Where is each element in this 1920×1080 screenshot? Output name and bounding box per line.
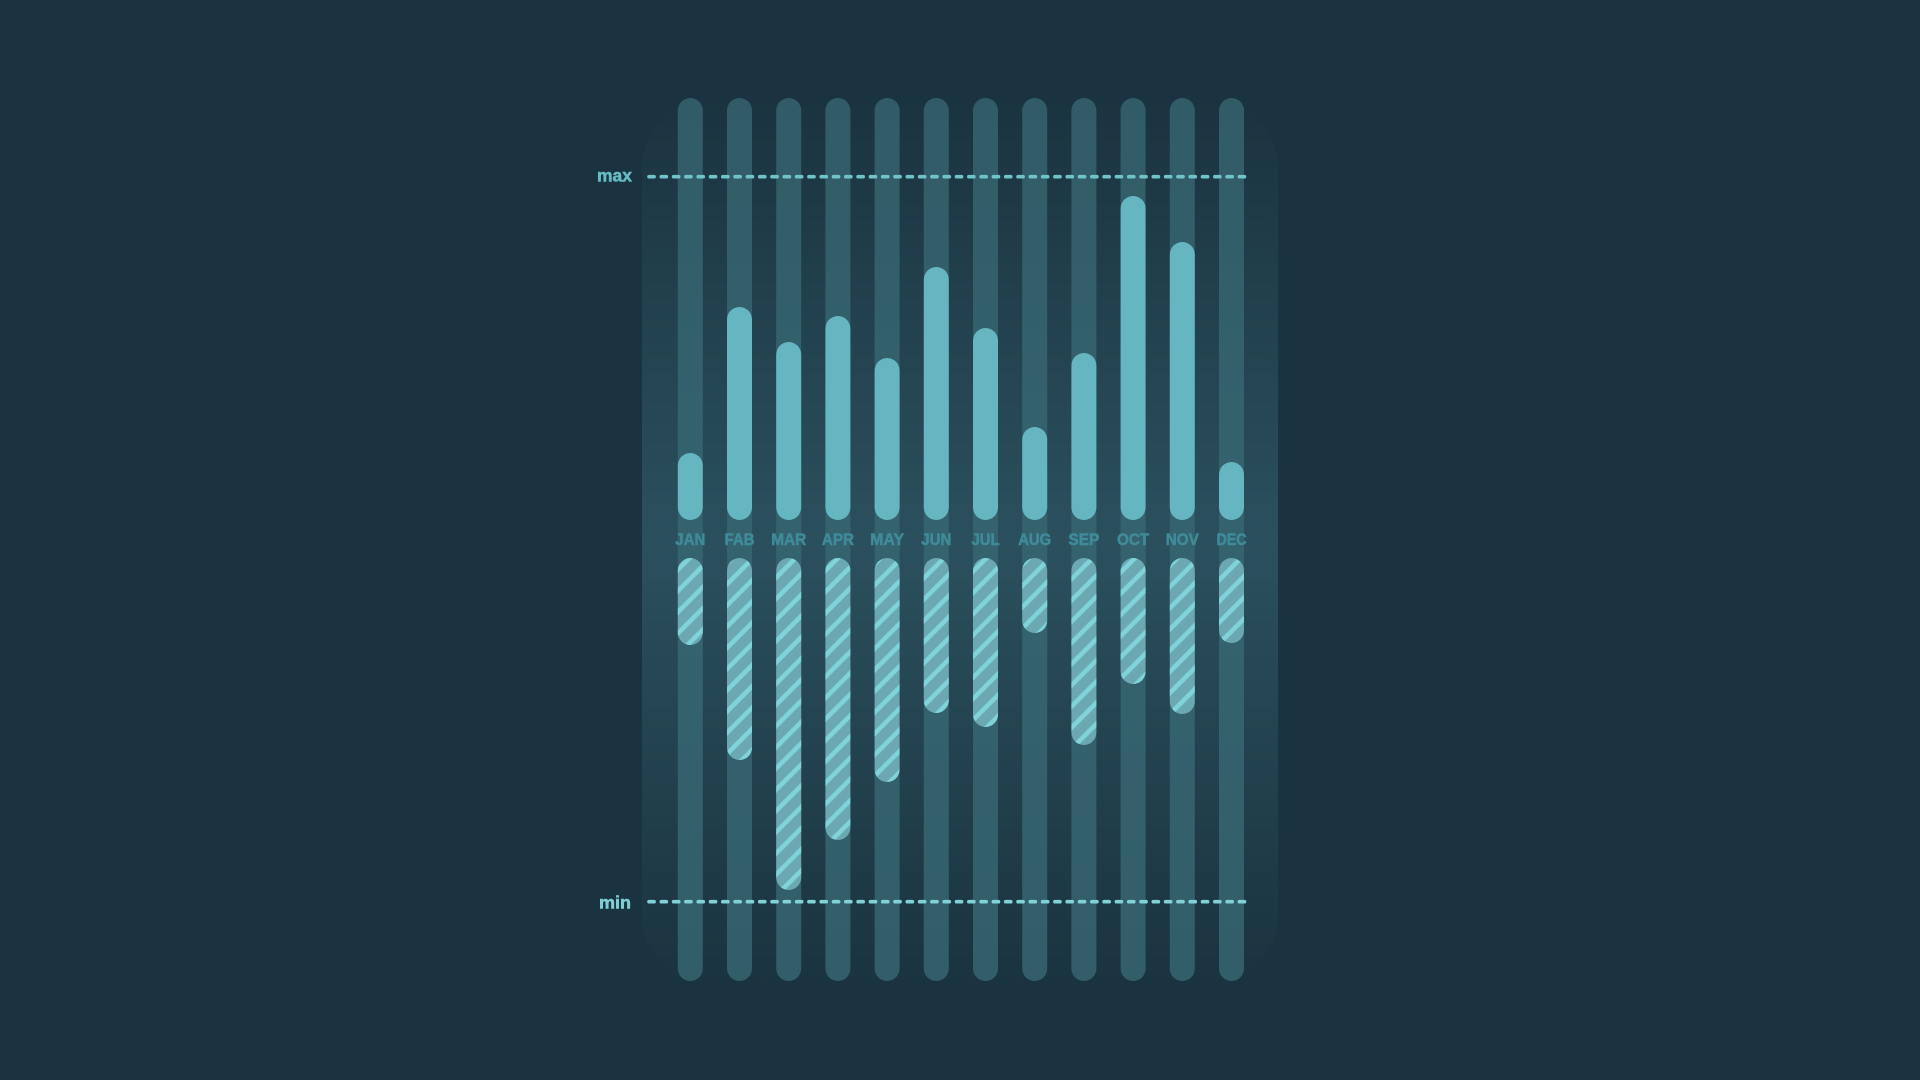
month labels: SEP: [1068, 531, 1099, 549]
min dashed line: [649, 900, 1245, 904]
min label: min: [599, 892, 631, 912]
month labels: FAB: [724, 531, 755, 549]
month labels: JAN: [675, 531, 705, 549]
max label: max: [597, 166, 632, 186]
month labels: AUG: [1018, 531, 1051, 549]
background panel: [642, 98, 1278, 985]
month labels: MAR: [771, 531, 806, 549]
month labels: DEC: [1216, 531, 1247, 549]
month labels: APR: [822, 531, 854, 549]
month labels: JUL: [972, 531, 1000, 549]
upper solid bars: [678, 196, 1244, 520]
month labels: JUN: [921, 531, 951, 549]
month labels: NOV: [1166, 531, 1199, 549]
lower hatched bars: [678, 558, 1244, 890]
month labels: OCT: [1117, 531, 1149, 549]
month labels: MAY: [870, 531, 904, 549]
month labels: [675, 531, 1247, 549]
max dashed line: [649, 175, 1245, 178]
background tracks: [678, 98, 1244, 981]
